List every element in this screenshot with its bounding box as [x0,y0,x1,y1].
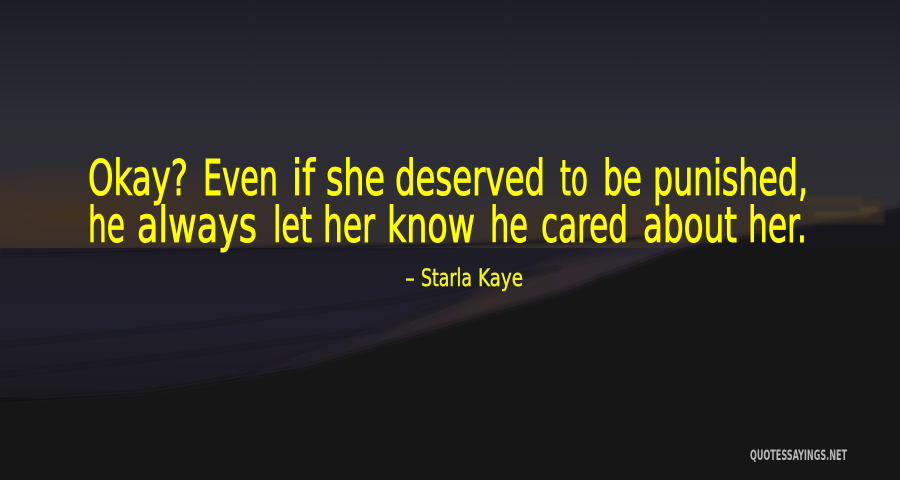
author attribution: Kaye [478,264,523,292]
quote line 2: about [643,197,737,254]
quote text [88,150,808,254]
distant buildings [775,196,885,224]
waves [0,268,560,375]
quote line 1: deserved [395,150,545,207]
quote line 2: her [323,197,376,254]
quote line 1: to [560,150,588,207]
quote line 1: Even [203,150,278,207]
quote line 1: she [326,150,385,207]
quote line 2: let [273,197,312,254]
sky [0,0,900,250]
sea [0,248,900,398]
author attribution: Starla [421,264,472,292]
quote line 1: if [292,150,316,207]
horizon line [0,238,650,254]
quote line 1: be [603,150,642,207]
quote line 2: he [88,197,125,254]
quote line 2: he [490,197,528,254]
quote line 2: cared [541,197,628,254]
wet shoreline glow [180,238,700,395]
quote line 2: her. [748,197,807,254]
dark sand [0,204,900,480]
quote line 2: always [137,197,257,254]
quote line 2: know [387,197,475,254]
author attribution: - [405,264,415,292]
sunset glow [0,160,880,270]
quote line 1: Okay? [88,150,188,207]
quote line 1: punished, [653,150,808,207]
